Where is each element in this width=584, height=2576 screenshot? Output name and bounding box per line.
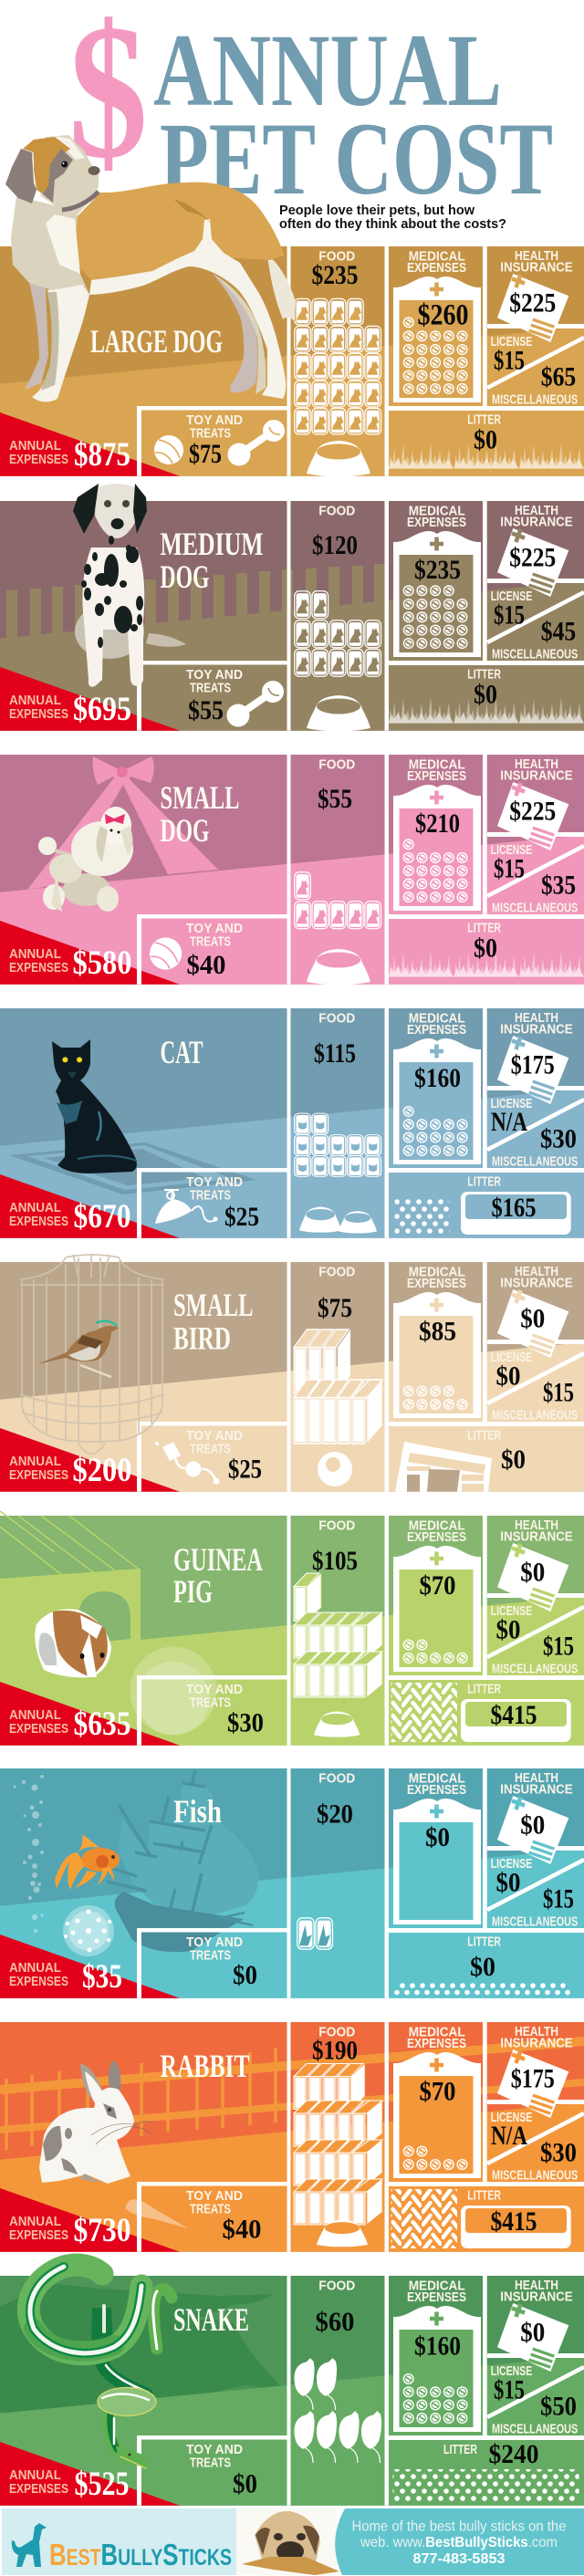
miscellaneous: $65 xyxy=(541,361,576,392)
litter: LITTER xyxy=(467,2188,501,2203)
intro text: often do they think about the costs? xyxy=(279,217,506,232)
panel: rabbit xyxy=(0,2022,584,2252)
heading: CAT xyxy=(161,1034,203,1070)
miscellaneous: $50 xyxy=(540,2391,577,2422)
food xyxy=(297,1772,355,1949)
toy and treats xyxy=(186,2443,257,2498)
annual expenses: ANNUAL xyxy=(9,694,61,708)
medical: MEDICAL xyxy=(409,2279,465,2294)
medical: $260 xyxy=(418,299,469,332)
license: LICENSE xyxy=(491,2364,533,2379)
panel: cat xyxy=(0,1008,584,1238)
litter xyxy=(391,2188,571,2248)
medical: MEDICAL xyxy=(409,1519,465,1534)
annual expenses: EXPENSES xyxy=(9,1975,68,1989)
medical: EXPENSES xyxy=(407,1530,466,1545)
license xyxy=(491,843,533,883)
toy and treats: TREATS xyxy=(190,427,231,442)
health insurance: $175 xyxy=(511,1050,555,1080)
medical xyxy=(393,250,481,402)
annual expenses xyxy=(9,944,131,982)
medical xyxy=(393,505,481,657)
annual expenses xyxy=(9,1958,122,1996)
food: $115 xyxy=(314,1038,356,1069)
litter xyxy=(391,1682,571,1742)
license: N/A xyxy=(491,1107,527,1137)
annual expenses: EXPENSES xyxy=(9,961,68,975)
medical: MEDICAL xyxy=(409,505,465,519)
heading: SNAKE xyxy=(173,2301,249,2338)
annual expenses: small bird xyxy=(9,1452,131,1489)
miscellaneous xyxy=(492,1883,579,1930)
health insurance: HEALTH xyxy=(515,1265,558,1279)
medical xyxy=(393,2026,481,2178)
food xyxy=(294,1266,382,1486)
icon: dalmatian xyxy=(73,484,186,687)
litter: LITTER xyxy=(467,1174,501,1189)
footer banner xyxy=(2,2508,584,2575)
litter: LITTER xyxy=(467,921,501,935)
health insurance xyxy=(497,504,573,597)
toy and treats: TOY AND xyxy=(186,413,243,428)
medical: EXPENSES xyxy=(407,516,466,530)
medical: EXPENSES xyxy=(407,1277,466,1291)
litter: $0 xyxy=(501,1444,526,1475)
toy and treats: $25 xyxy=(224,1202,259,1232)
icon: black cat xyxy=(52,1039,137,1173)
health insurance: INSURANCE xyxy=(500,1022,573,1037)
logo text: BESTBULLYSTICKS xyxy=(49,2538,232,2571)
license: LICENSE xyxy=(491,589,533,604)
litter: LITTER xyxy=(443,2443,477,2457)
health insurance: INSURANCE xyxy=(500,2289,573,2304)
health insurance xyxy=(497,2025,573,2118)
panel: guinea pig xyxy=(0,1511,584,1746)
license xyxy=(491,1351,533,1391)
medical xyxy=(393,1519,481,1672)
heading: DOG xyxy=(161,812,210,849)
health insurance: INSURANCE xyxy=(500,515,573,529)
litter xyxy=(395,1428,526,1492)
license: $0 xyxy=(496,1614,520,1644)
toy and treats: TOY AND xyxy=(186,1175,243,1190)
toy and treats: $40 xyxy=(223,2215,261,2245)
medical: $160 xyxy=(414,2331,461,2362)
medical: $70 xyxy=(420,1570,456,1601)
miscellaneous xyxy=(492,2137,579,2184)
miscellaneous xyxy=(492,1378,579,1424)
toy and treats: TOY AND xyxy=(186,668,243,683)
litter: LITTER xyxy=(467,412,501,427)
heading xyxy=(173,1541,263,1610)
food xyxy=(295,1012,381,1234)
license: $15 xyxy=(494,345,525,375)
litter: $415 xyxy=(491,2206,537,2237)
toy and treats xyxy=(150,922,243,980)
heading: BIRD xyxy=(173,1319,231,1356)
litter: LITTER xyxy=(467,667,501,682)
medical xyxy=(393,1772,481,1924)
litter: $0 xyxy=(474,933,497,964)
miscellaneous xyxy=(492,361,579,408)
litter: $240 xyxy=(489,2439,538,2469)
miscellaneous: $30 xyxy=(540,1124,577,1153)
annual expenses: $580 xyxy=(73,944,131,982)
miscellaneous xyxy=(492,871,579,916)
license xyxy=(491,1604,533,1644)
litter xyxy=(389,921,584,977)
medical: MEDICAL xyxy=(409,1012,465,1027)
toy and treats: TREATS xyxy=(190,1695,231,1710)
medical: MEDICAL xyxy=(409,2026,465,2040)
health insurance: INSURANCE xyxy=(500,260,573,275)
icon: bird in cage xyxy=(20,1255,164,1454)
license: $15 xyxy=(494,600,525,630)
health insurance: HEALTH xyxy=(515,2279,558,2293)
license: LICENSE xyxy=(491,1351,533,1365)
toy and treats: $25 xyxy=(228,1455,262,1484)
toy and treats: TREATS xyxy=(190,2456,231,2471)
food: FOOD xyxy=(318,1266,355,1280)
medical: EXPENSES xyxy=(407,1023,466,1038)
toy and treats: TREATS xyxy=(190,681,231,695)
food: FOOD xyxy=(318,2279,355,2294)
miscellaneous: $15 xyxy=(543,1883,574,1914)
miscellaneous: $15 xyxy=(543,1632,574,1661)
annual expenses: EXPENSES xyxy=(9,2228,68,2243)
food: $120 xyxy=(312,530,358,560)
medical: MEDICAL xyxy=(409,250,465,265)
heading: GUINEA xyxy=(173,1541,263,1578)
medical xyxy=(393,758,481,911)
health insurance: $225 xyxy=(509,288,556,318)
health insurance: $0 xyxy=(520,2318,545,2348)
food xyxy=(295,250,381,476)
miscellaneous xyxy=(492,2391,579,2437)
health insurance: HEALTH xyxy=(515,249,558,264)
toy and treats xyxy=(186,668,284,726)
toy and treats xyxy=(154,413,285,469)
annual expenses: small bird: EXPENSES xyxy=(9,1468,68,1483)
annual expenses xyxy=(9,691,131,728)
medical: $210 xyxy=(415,808,460,839)
license: $0 xyxy=(496,1867,520,1897)
license xyxy=(491,2111,533,2151)
toy and treats xyxy=(186,1935,257,1990)
title line one: ANNUAL xyxy=(153,14,502,128)
panel: snake xyxy=(0,2276,584,2506)
annual expenses xyxy=(9,2466,130,2503)
toy and treats: $55 xyxy=(188,695,224,725)
health insurance: $225 xyxy=(509,543,556,573)
health insurance: INSURANCE xyxy=(500,2036,573,2050)
toy and treats: TOY AND xyxy=(186,1429,243,1444)
annual expenses: ANNUAL xyxy=(9,2468,61,2483)
food: FOOD xyxy=(318,2026,355,2040)
litter: LITTER xyxy=(467,1935,501,1949)
litter xyxy=(389,412,584,469)
health insurance: HEALTH xyxy=(515,757,558,772)
annual expenses: $695 xyxy=(73,691,131,728)
annual expenses: ANNUAL xyxy=(9,2215,61,2229)
health insurance: INSURANCE xyxy=(500,1782,573,1797)
heading xyxy=(173,1287,254,1356)
license xyxy=(491,2364,533,2404)
heading: SMALL xyxy=(161,779,239,816)
annual expenses: ANNUAL xyxy=(9,1201,61,1215)
license xyxy=(491,335,533,375)
miscellaneous xyxy=(492,1124,579,1170)
health insurance: $175 xyxy=(511,2064,555,2094)
license: LICENSE xyxy=(491,1097,533,1111)
miscellaneous xyxy=(492,617,579,662)
medical: $160 xyxy=(414,1063,461,1093)
medical: EXPENSES xyxy=(407,261,466,276)
medical: EXPENSES xyxy=(407,2037,466,2051)
annual expenses: ANNUAL xyxy=(9,1708,61,1723)
toy and treats: TREATS xyxy=(190,934,231,949)
license: LICENSE xyxy=(491,1857,533,1872)
food xyxy=(295,2279,381,2463)
toy and treats: TOY AND xyxy=(186,922,243,936)
health insurance xyxy=(497,1771,573,1864)
litter: $165 xyxy=(491,1193,537,1223)
medical xyxy=(393,1266,481,1418)
miscellaneous: $35 xyxy=(541,871,576,900)
miscellaneous xyxy=(492,1632,579,1677)
toy and treats: TREATS xyxy=(190,2203,231,2217)
license xyxy=(491,589,533,630)
panel: small dog xyxy=(0,755,584,985)
health insurance: HEALTH xyxy=(515,1011,558,1026)
health insurance: HEALTH xyxy=(515,1518,558,1533)
annual expenses xyxy=(9,436,130,474)
medical: MEDICAL xyxy=(409,758,465,773)
toy and treats: $40 xyxy=(186,950,226,980)
title xyxy=(68,0,553,216)
litter xyxy=(393,2439,579,2502)
teal message block xyxy=(335,2508,584,2575)
medical: $0 xyxy=(425,1822,450,1852)
toy and treats: TOY AND xyxy=(186,2189,243,2204)
food: FOOD xyxy=(318,1012,355,1027)
annual expenses xyxy=(9,1198,131,1236)
icon: guinea pig xyxy=(35,1609,111,1677)
food: FOOD xyxy=(318,758,355,773)
litter: $415 xyxy=(491,1700,537,1730)
toy and treats: TREATS xyxy=(190,1949,231,1964)
license: N/A xyxy=(491,2121,527,2151)
health insurance xyxy=(497,1011,573,1104)
panel: medium dog xyxy=(0,501,584,731)
toy and treats: $30 xyxy=(227,1708,264,1737)
food: FOOD xyxy=(318,505,355,519)
toy and treats: TREATS xyxy=(190,1188,231,1203)
annual expenses: ANNUAL xyxy=(9,1961,61,1976)
annual expenses: $875 xyxy=(74,436,130,474)
health insurance xyxy=(497,1265,573,1358)
toy and treats xyxy=(155,1429,262,1484)
annual expenses: ANNUAL xyxy=(9,439,61,454)
miscellaneous: $45 xyxy=(541,617,576,646)
intro text: People love their pets, but how xyxy=(279,203,475,218)
license: LICENSE xyxy=(491,843,533,858)
medical: $235 xyxy=(414,555,461,585)
health insurance xyxy=(497,757,573,850)
litter xyxy=(395,1174,571,1235)
food xyxy=(295,758,381,985)
icon: goldfish, bubbles and anemone xyxy=(13,1775,120,1956)
food: $75 xyxy=(318,1293,352,1323)
miscellaneous: $30 xyxy=(540,2137,577,2168)
health insurance: HEALTH xyxy=(515,504,558,518)
food: FOOD xyxy=(318,1519,355,1534)
medical: MEDICAL xyxy=(409,1772,465,1787)
annual expenses: EXPENSES xyxy=(9,1215,68,1229)
litter: $0 xyxy=(470,1952,495,1982)
medical xyxy=(393,1012,481,1164)
footer text xyxy=(352,2519,567,2567)
food: $190 xyxy=(312,2035,358,2066)
litter: $0 xyxy=(474,680,497,710)
annual expenses: $670 xyxy=(73,1198,131,1236)
medical: EXPENSES xyxy=(407,2290,466,2305)
litter xyxy=(394,1935,570,1995)
annual expenses xyxy=(9,2212,131,2249)
food: FOOD xyxy=(318,250,355,265)
health insurance: INSURANCE xyxy=(500,1276,573,1290)
annual expenses: EXPENSES xyxy=(9,1722,68,1736)
license: LICENSE xyxy=(491,2111,533,2125)
medical: $70 xyxy=(420,2077,456,2106)
annual expenses: $35 xyxy=(82,1958,122,1996)
license xyxy=(491,1857,533,1897)
footer text: 877-483-5853 xyxy=(412,2551,506,2567)
toy and treats xyxy=(186,2189,261,2245)
food xyxy=(295,505,381,731)
medical: $85 xyxy=(419,1316,456,1347)
food xyxy=(294,1519,382,1737)
health insurance: $225 xyxy=(509,797,556,827)
toy and treats: $0 xyxy=(233,2469,257,2498)
annual expenses: $730 xyxy=(73,2212,131,2249)
food xyxy=(294,2026,382,2247)
panel: large dog xyxy=(0,246,584,476)
health insurance: INSURANCE xyxy=(500,1529,573,1544)
license: LICENSE xyxy=(491,1604,533,1619)
annual expenses: EXPENSES xyxy=(9,2482,68,2497)
toy and treats xyxy=(155,1175,259,1232)
toy and treats xyxy=(137,1662,264,1737)
litter: LITTER xyxy=(467,1682,501,1696)
heading: DOG xyxy=(161,558,210,595)
footer text: web. www.BestBullySticks.com xyxy=(360,2535,558,2550)
icon: rabbit xyxy=(39,2060,153,2184)
license: LICENSE xyxy=(491,335,533,349)
toy and treats: $0 xyxy=(233,1960,257,1990)
panel: small bird xyxy=(0,1262,584,1492)
heading: PIG xyxy=(173,1573,213,1610)
health insurance xyxy=(497,249,573,342)
annual expenses: EXPENSES xyxy=(9,453,68,467)
heading: SMALL xyxy=(173,1287,254,1323)
food: $105 xyxy=(312,1546,358,1576)
medical: EXPENSES xyxy=(407,769,466,784)
health insurance: HEALTH xyxy=(515,2025,558,2039)
food: FOOD xyxy=(318,1772,355,1787)
litter: $0 xyxy=(474,425,497,455)
food: $60 xyxy=(316,2307,354,2337)
health insurance: $0 xyxy=(520,1810,545,1841)
heading: LARGE DOG xyxy=(90,323,223,360)
food: $235 xyxy=(312,260,358,290)
icon: snake xyxy=(28,2265,172,2468)
heading xyxy=(161,526,263,595)
icon: pug with stick xyxy=(242,2511,339,2575)
license: $0 xyxy=(496,1361,520,1391)
annual expenses: small bird: $200 xyxy=(73,1452,131,1489)
health insurance: INSURANCE xyxy=(500,768,573,783)
annual expenses: small bird: ANNUAL xyxy=(9,1455,61,1469)
icon: bow and poodle xyxy=(38,756,154,912)
annual expenses: $635 xyxy=(73,1705,131,1743)
medical: EXPENSES xyxy=(407,1783,466,1798)
heading: MEDIUM xyxy=(161,526,263,562)
toy and treats: TOY AND xyxy=(186,1935,243,1950)
footer text: Home of the best bully sticks on the xyxy=(352,2519,567,2535)
toy and treats: TOY AND xyxy=(186,2443,243,2457)
health insurance: HEALTH xyxy=(515,1771,558,1786)
annual expenses: EXPENSES xyxy=(9,707,68,722)
annual expenses: ANNUAL xyxy=(9,947,61,962)
heading: Fish xyxy=(173,1793,222,1830)
intro text xyxy=(279,203,506,232)
toy and treats: $75 xyxy=(189,439,222,469)
medical xyxy=(393,2279,481,2432)
license: $15 xyxy=(494,2374,525,2404)
food: $20 xyxy=(317,1799,353,1829)
license xyxy=(491,1097,533,1137)
litter xyxy=(389,667,584,724)
toy and treats: TREATS xyxy=(190,1442,231,1456)
health insurance xyxy=(497,2279,573,2372)
health insurance xyxy=(497,1518,573,1611)
annual expenses: $525 xyxy=(75,2466,130,2503)
medical: MEDICAL xyxy=(409,1266,465,1280)
icon: teal dog logo xyxy=(12,2523,47,2567)
litter: LITTER xyxy=(467,1428,501,1443)
heading: RABBIT xyxy=(161,2048,250,2084)
health insurance: $0 xyxy=(520,1558,545,1588)
health insurance: $0 xyxy=(520,1304,545,1334)
heading xyxy=(161,779,239,849)
food: $55 xyxy=(318,784,352,814)
license: $15 xyxy=(494,853,525,883)
icon: large dog xyxy=(5,135,296,402)
panel: fish xyxy=(0,1768,584,1998)
annual expenses xyxy=(9,1705,131,1743)
miscellaneous: $15 xyxy=(543,1378,574,1407)
toy and treats: TOY AND xyxy=(186,1683,243,1697)
